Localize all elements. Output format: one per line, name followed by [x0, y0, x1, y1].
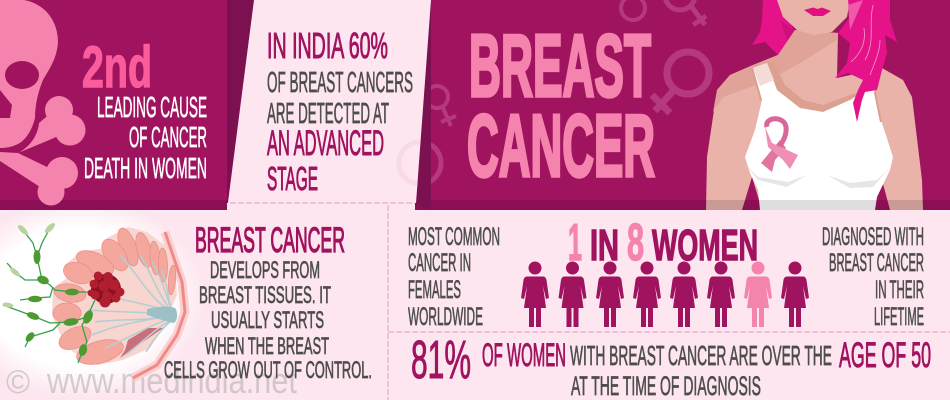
panel: 81 percent over age 50	[411, 330, 931, 400]
text: in India 60%: IN INDIA 60%	[267, 25, 388, 66]
illustration: woman with pink ribbon	[706, 0, 923, 210]
gaps between arms and top	[742, 177, 890, 210]
bust shadows	[746, 165, 807, 187]
heading: 1 in 8 women: 8	[627, 214, 644, 272]
divider lines	[230, 203, 950, 400]
text: breast cancer description: USUALLY STARTS	[211, 307, 324, 334]
panel: India statistic	[227, 0, 441, 210]
hair back left	[752, 0, 795, 55]
text: most common cancer	[408, 223, 500, 331]
infographic canvas: LEADING CAUSE	[97, 92, 207, 124]
hair right	[835, 0, 897, 122]
panel: 1 in 8 women	[408, 214, 924, 331]
lymph nodes	[3, 228, 95, 363]
icon: ribbon	[761, 119, 798, 172]
text: breast cancer description: BREAST CANCER	[195, 221, 345, 260]
title: breast cancer	[467, 16, 655, 195]
text: in India 60%: STAGE	[267, 160, 318, 197]
icons: row of eight women	[521, 262, 809, 327]
icon: skull and crossbones	[0, 0, 86, 206]
darkening strip	[706, 200, 923, 210]
heading: 1 in 8 women	[568, 214, 758, 272]
stat: 2nd: 2nd	[82, 35, 152, 100]
top	[745, 63, 893, 210]
text: breast cancer description: WHEN THE BREAST	[205, 333, 329, 360]
watermark: www.medindia.net	[46, 360, 297, 400]
heading: 1 in 8 women: WOMEN	[652, 221, 758, 270]
heading: 1 in 8 women: IN	[590, 221, 619, 270]
strap	[753, 63, 774, 86]
text: in India 60%: ARE DETECTED AT	[267, 98, 389, 130]
text: breast cancer description: DEVELOPS FROM	[210, 257, 320, 284]
lips	[804, 8, 831, 16]
heading: 1 in 8 women: 1	[568, 214, 582, 272]
text: most common cancer: CANCER IN	[408, 249, 471, 277]
text: in India 60%: AN ADVANCED	[267, 124, 384, 163]
panel: 81 percent over age 50: OF WOMEN	[482, 337, 566, 373]
text: in India 60%	[267, 25, 413, 197]
tumor	[88, 272, 124, 308]
text: diagnosed with breast cancer	[822, 223, 924, 331]
text: most common cancer: WORLDWIDE	[408, 303, 483, 331]
text: breast cancer description	[164, 221, 372, 384]
shoulder shadow	[713, 30, 838, 112]
white glow behind anatomy	[0, 210, 192, 388]
face	[777, 0, 850, 35]
panel: 1 in 8 women: MOST COMMON	[408, 223, 500, 251]
text: breast cancer description: CELLS GROW OUT OF CONTROL.	[164, 357, 372, 384]
text: breast cancer description: BREAST TISSUES. IT	[199, 282, 331, 309]
watermark: ©	[6, 363, 30, 400]
text: most common cancer: FEMALES	[408, 276, 461, 304]
neckline shadow	[767, 63, 867, 112]
infographic canvas: CANCER	[467, 96, 655, 195]
panel: India statistic: OF BREAST CANCERS	[267, 67, 413, 99]
panel: breast anatomy	[0, 198, 372, 400]
illustration: breast cross-section	[2, 221, 185, 378]
arms and shoulders	[706, 30, 923, 210]
text: leading cause of cancer death in women	[84, 92, 207, 185]
panel: second leading cause	[0, 0, 207, 206]
infographic canvas: DEATH IN WOMEN	[84, 153, 207, 185]
stat: 81%: 81%	[411, 330, 471, 390]
icons: faint female symbols	[399, 0, 709, 184]
top banner background	[0, 0, 950, 210]
title: breast cancer: BREAST	[469, 16, 651, 115]
infographic canvas: OF CANCER	[129, 122, 207, 154]
